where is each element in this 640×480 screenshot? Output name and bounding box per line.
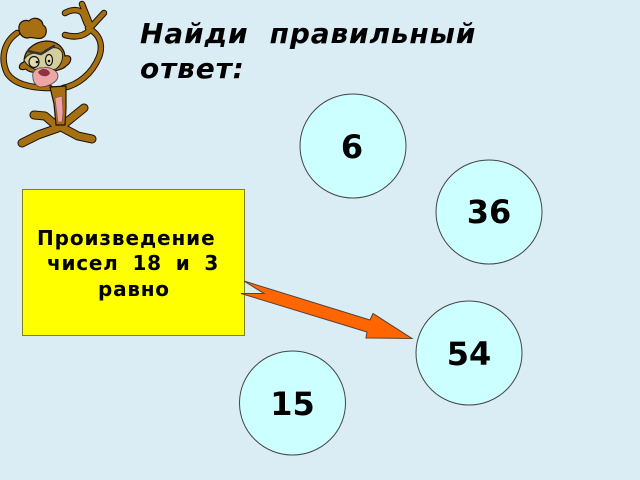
- monkey left hand: [19, 18, 46, 39]
- icon: monkey: [4, 4, 104, 143]
- answer: 6: [300, 94, 406, 198]
- answer: 54: [416, 301, 522, 405]
- answer: 54: 54: [447, 335, 491, 373]
- monkey head: [19, 41, 71, 73]
- panel: question box: [22, 190, 244, 336]
- answer: 15: [240, 351, 346, 455]
- answer: 6: 6: [341, 128, 363, 166]
- question text: [37, 226, 219, 301]
- title: Найди правильный: [140, 17, 476, 50]
- question text: равно: [98, 277, 170, 301]
- monkey face: [24, 48, 63, 71]
- arrow: [241, 281, 412, 338]
- monkey muzzle: [33, 68, 58, 87]
- answer: 15: 15: [270, 385, 315, 423]
- title: ответ:: [140, 52, 245, 85]
- monkey body: [50, 86, 66, 125]
- question text: Произведение: [37, 226, 216, 250]
- monkey limbs: [4, 4, 104, 143]
- title: [140, 17, 476, 85]
- question text: чисел 18 и 3: [47, 251, 219, 275]
- answer: 36: [436, 160, 542, 264]
- monkey belly: [55, 96, 63, 122]
- answer: 36: 36: [467, 193, 511, 231]
